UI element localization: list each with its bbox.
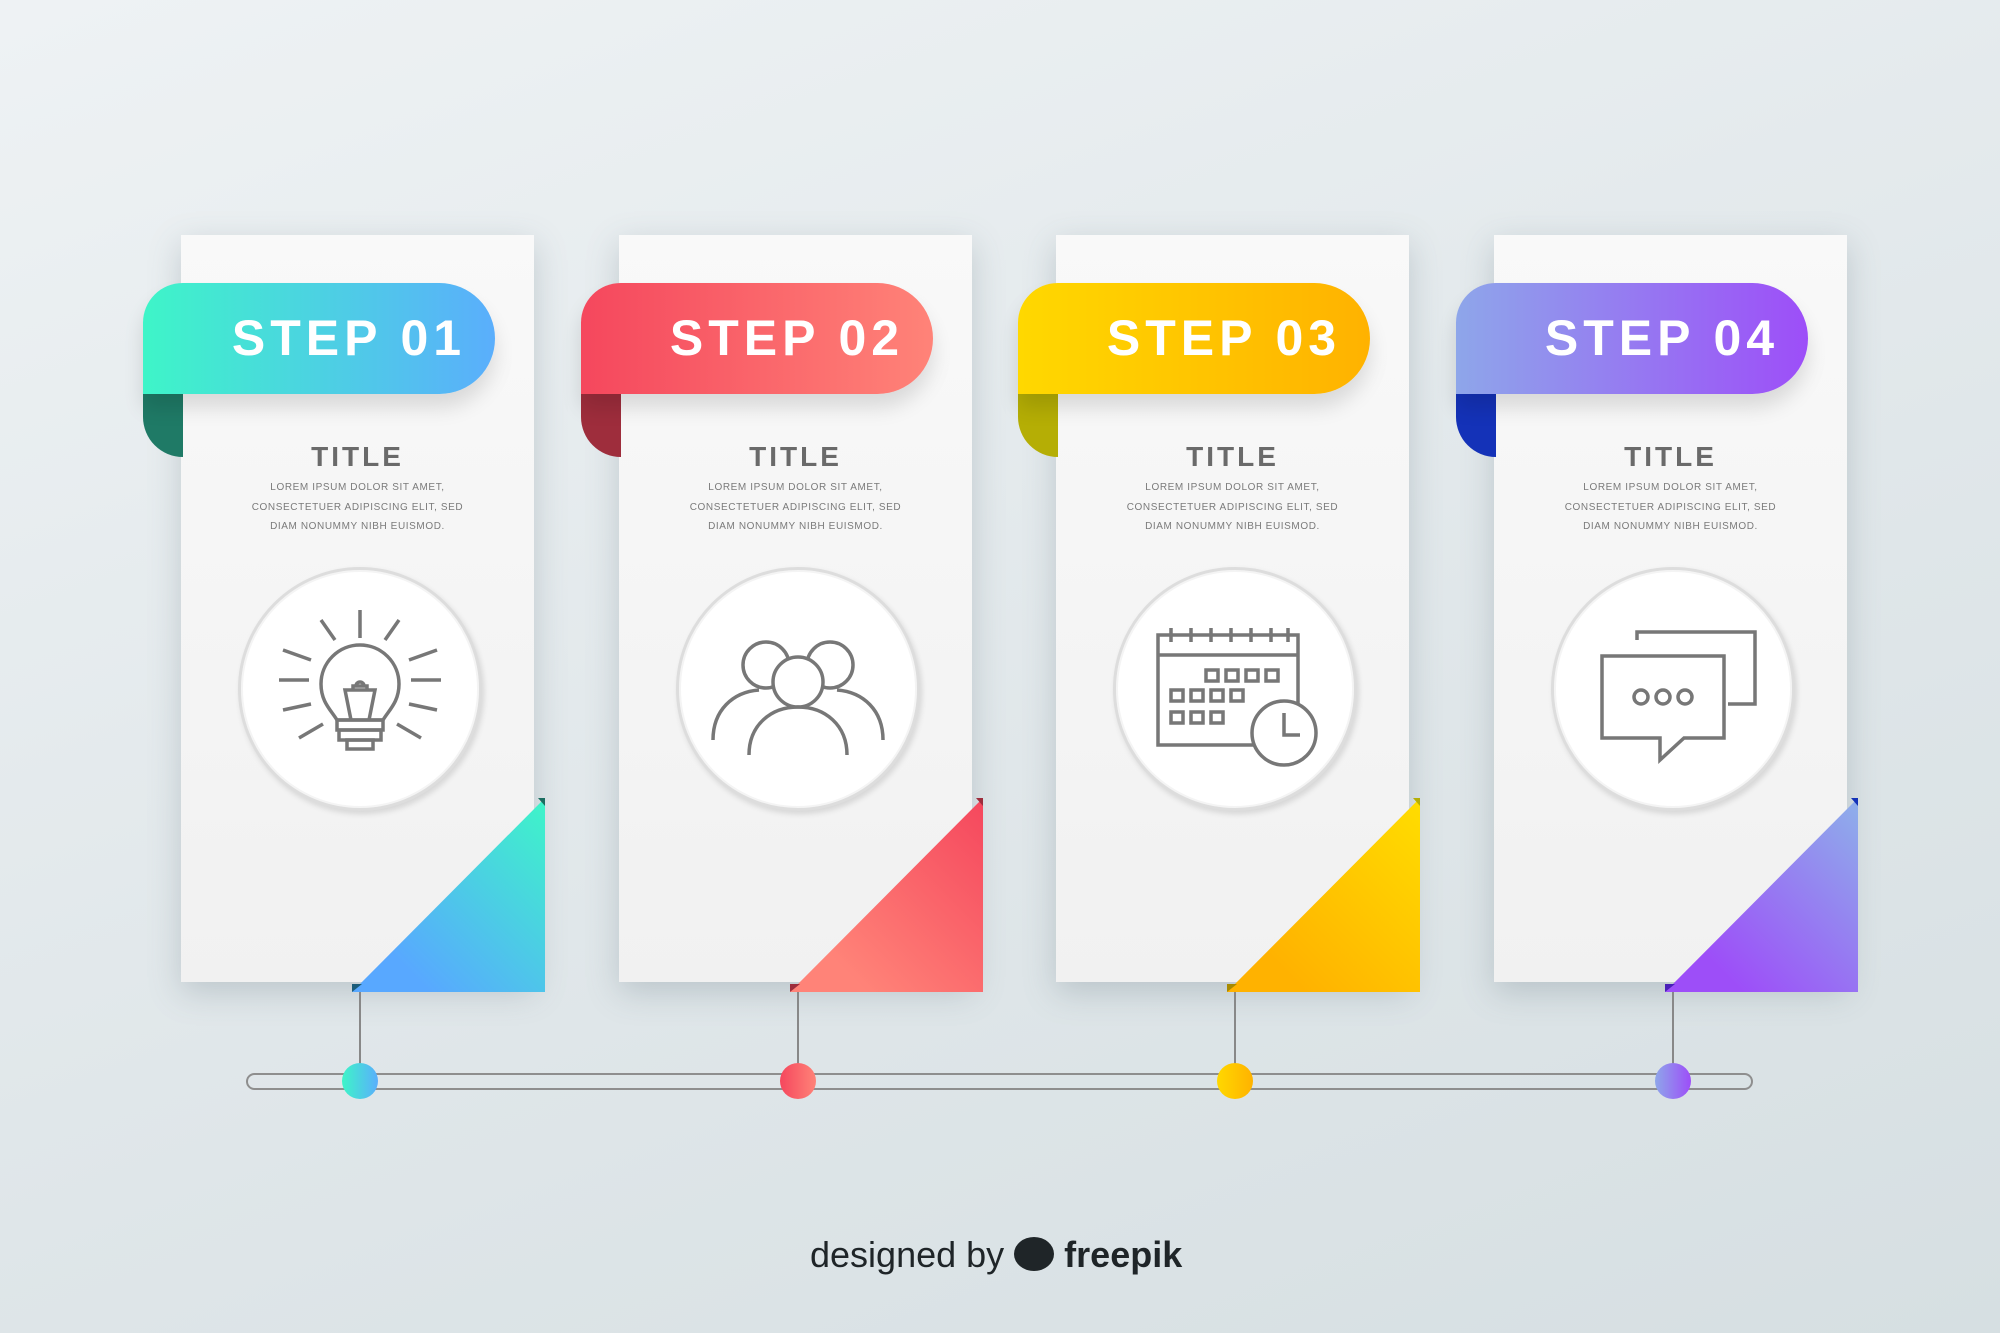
- step 03 card: [1056, 235, 1409, 982]
- ribbon curl 4: [1456, 394, 1496, 457]
- ribbon: STEP 03: STEP 03: [1107, 310, 1341, 366]
- text: TITLE: [311, 441, 404, 472]
- text: CONSECTETUER ADIPISCING ELIT, SED: [1127, 502, 1338, 512]
- text: CONSECTETUER ADIPISCING ELIT, SED: [690, 502, 901, 512]
- text block 3: [1127, 441, 1338, 532]
- ribbon: STEP 02: [581, 283, 933, 394]
- ribbon: STEP 03: [1018, 283, 1370, 394]
- ribbon curl 3: [1018, 394, 1058, 457]
- text: TITLE: [1624, 441, 1717, 472]
- fold corner 1: [352, 798, 545, 992]
- timeline track: [246, 1073, 1753, 1090]
- icon circle 2: people: [676, 567, 920, 811]
- text: TITLE: [749, 441, 842, 472]
- text: DIAM NONUMMY NIBH EUISMOD.: [708, 521, 883, 532]
- fold corner 3: [1227, 798, 1420, 992]
- timeline dot 1: [342, 1063, 378, 1099]
- timeline dot 3: [1217, 1063, 1253, 1099]
- text: DIAM NONUMMY NIBH EUISMOD.: [270, 521, 445, 532]
- step 04 card: [1494, 235, 1847, 982]
- text: LOREM IPSUM DOLOR SIT AMET,: [708, 482, 883, 493]
- ribbon: STEP 02: STEP 02: [670, 310, 904, 366]
- step 01 card: [181, 235, 534, 982]
- text: DIAM NONUMMY NIBH EUISMOD.: [1583, 521, 1758, 532]
- text: CONSECTETUER ADIPISCING ELIT, SED: [1565, 502, 1776, 512]
- step 02 card: [619, 235, 972, 982]
- timeline dot 4: [1655, 1063, 1691, 1099]
- ribbon: STEP 01: [143, 283, 495, 394]
- fold corner 4: [1665, 798, 1858, 992]
- text: LOREM IPSUM DOLOR SIT AMET,: [1145, 482, 1320, 493]
- icon circle 3: calendar: [1113, 567, 1357, 811]
- text: LOREM IPSUM DOLOR SIT AMET,: [1583, 482, 1758, 493]
- ribbon: STEP 04: [1456, 283, 1808, 394]
- text: LOREM IPSUM DOLOR SIT AMET,: [270, 482, 445, 493]
- text: CONSECTETUER ADIPISCING ELIT, SED: [252, 502, 463, 512]
- fold corner 2: [790, 798, 983, 992]
- timeline dot 2: [780, 1063, 816, 1099]
- connector lines: [359, 992, 361, 1080]
- ribbon: STEP 04: STEP 04: [1545, 310, 1779, 366]
- text block 2: [690, 441, 901, 532]
- ribbon curl 2: [581, 394, 621, 457]
- icon circle 1: lightbulb: [238, 567, 482, 811]
- text block 1: [252, 441, 463, 532]
- text: DIAM NONUMMY NIBH EUISMOD.: [1145, 521, 1320, 532]
- text block 4: [1565, 441, 1776, 532]
- ribbon: STEP 01: STEP 01: [232, 310, 466, 366]
- ribbon curl 1: [143, 394, 183, 457]
- icon circle 4: chat: [1551, 567, 1795, 811]
- text: TITLE: [1186, 441, 1279, 472]
- footer credit: designed by freepik: [810, 1234, 1182, 1275]
